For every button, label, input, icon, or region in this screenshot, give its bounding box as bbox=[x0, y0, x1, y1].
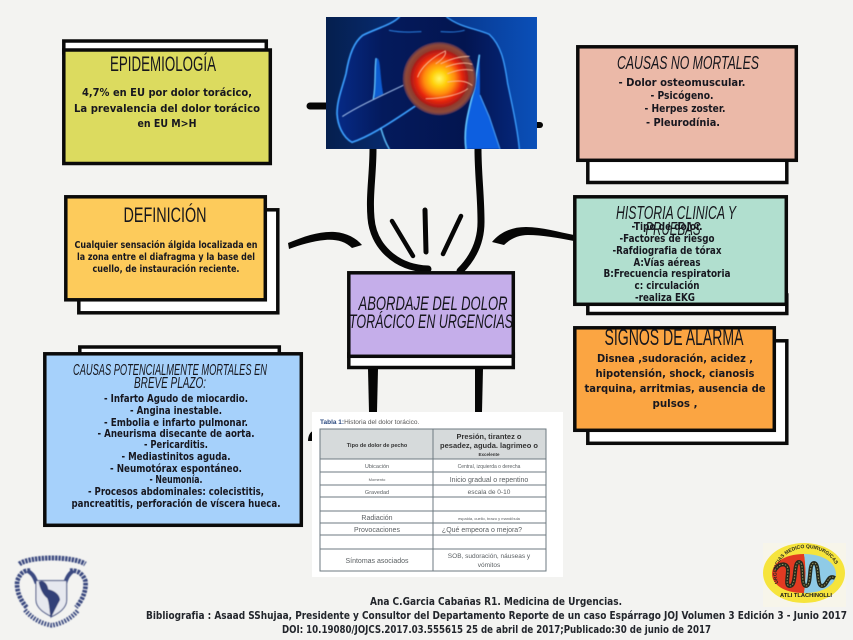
heading: historia clínica y pruebas: PRUEBAS bbox=[646, 219, 700, 239]
table: historia del dolor torácico: Provocaciones bbox=[354, 527, 400, 534]
list: causas no mortales bbox=[618, 77, 746, 129]
torso and arms silhouette bbox=[337, 17, 519, 149]
list: causas potencialmente mortales: - Aneurisma disecante de aorta. bbox=[98, 428, 254, 440]
list: causas potencialmente mortales: - Infarto Agudo de miocardio. bbox=[104, 393, 248, 405]
panel: central title bbox=[349, 273, 513, 368]
footer: credits and bibliography: Ana C.Garcia Cabañas R1. Medicina de Urgencias. bbox=[370, 596, 622, 608]
text: signos de alarma: Disnea ,sudoración, acidez , bbox=[597, 352, 753, 365]
connector lines bbox=[288, 106, 574, 441]
title bbox=[349, 294, 513, 333]
table: historia del dolor torácico bbox=[312, 412, 563, 577]
table: historia del dolor torácico: Presión, tirantez o bbox=[456, 432, 522, 441]
heading: causas potencialmente mortales: CAUSAS POTENCIALMENTE MORTALES EN bbox=[73, 362, 267, 379]
list: historia clínica y pruebas: -Factores de riesgo bbox=[620, 233, 714, 245]
text: signos de alarma: pulsos , bbox=[652, 397, 698, 410]
list: historia clínica y pruebas bbox=[604, 221, 730, 304]
panel: epidemiología bbox=[64, 41, 270, 164]
list: historia clínica y pruebas: -Tipo de dolor. bbox=[632, 221, 702, 233]
list: causas potencialmente mortales: pancreatitis, perforación de víscera hueca. bbox=[72, 498, 280, 510]
footer: credits and bibliography: DOI: 10.19080/JOJCS.2017.03.555615 25 de abril de 2017;Publicado:30 de junio de 2017 bbox=[282, 624, 711, 636]
table: historia del dolor torácico: pesadez, aguda. lagrimeo o bbox=[440, 441, 538, 450]
list: historia clínica y pruebas: -Rafdiografia de tórax bbox=[612, 245, 722, 257]
list: causas potencialmente mortales bbox=[72, 393, 280, 510]
table: historia del dolor torácico: Momento bbox=[369, 477, 386, 482]
text: epidemiología: en EU M>H bbox=[138, 117, 196, 130]
heading: epidemiología: EPIDEMIOLOGÍA bbox=[110, 53, 216, 76]
list: causas no mortales: - Pleurodínia. bbox=[646, 117, 720, 129]
table: historia del dolor torácico: SOB, sudoración, náuseas y bbox=[448, 553, 531, 560]
list: causas no mortales: - Dolor osteomuscular. bbox=[618, 77, 746, 89]
text: epidemiología: La prevalencia del dolor torácico bbox=[74, 102, 260, 115]
table: historia del dolor torácico: Inicio gradual o repentino bbox=[450, 477, 528, 484]
table: historia del dolor torácico: ¿Qué empeora o mejora? bbox=[442, 527, 522, 534]
heading: definición: DEFINICIÓN bbox=[124, 204, 206, 227]
table: historia del dolor torácico: Tabla 1:Historia del dolor torácico. bbox=[320, 419, 419, 426]
list: causas potencialmente mortales: - Pericarditis. bbox=[144, 439, 208, 451]
panel: signos de alarma bbox=[575, 324, 787, 443]
list: causas potencialmente mortales: - Embolia e infarto pulmonar. bbox=[104, 417, 248, 429]
panel: definición bbox=[66, 197, 278, 313]
list: causas potencialmente mortales: - Neumonía. bbox=[150, 474, 202, 486]
table: historia del dolor torácico: Radiación bbox=[361, 515, 393, 522]
text: signos de alarma: hipotensión, shock, cianosis bbox=[596, 367, 755, 380]
table: historia del dolor torácico: Ubicación bbox=[365, 464, 389, 470]
heading: causas potencialmente mortales bbox=[73, 362, 267, 392]
table: historia del dolor torácico: Gravedad bbox=[365, 490, 389, 496]
table: historia del dolor torácico: Central, izquierda o derecha bbox=[458, 464, 521, 470]
footer: credits and bibliography bbox=[146, 596, 847, 636]
heading: historia clínica y pruebas bbox=[616, 203, 737, 239]
logo: UNAM bbox=[17, 558, 86, 625]
table: historia del dolor torácico: Tipo de dolor de pecho bbox=[347, 443, 408, 449]
list: historia clínica y pruebas: -realiza EKG bbox=[635, 292, 695, 304]
list: causas potencialmente mortales: - Mediastinitos aguda. bbox=[122, 451, 230, 463]
logo: urgencias médico quirúrgicas: ATLI TLACHINOLLI bbox=[780, 593, 832, 599]
list: causas potencialmente mortales: - Procesos abdominales: colecistitis, bbox=[88, 486, 264, 498]
table: historia del dolor torácico: Excelente bbox=[478, 452, 500, 457]
list: causas potencialmente mortales: - Neumotórax espontáneo. bbox=[110, 463, 242, 475]
logo: urgencias médico quirúrgicas: URGENCIAS MEDICO QUIRURGICAS bbox=[773, 544, 838, 584]
panel: causas potencialmente mortales bbox=[45, 347, 301, 525]
text: epidemiología bbox=[74, 86, 260, 130]
title: ABORDAJE DEL DOLOR bbox=[358, 294, 508, 315]
text: definición: cuello, de instauración reciente. bbox=[92, 264, 240, 275]
list: historia clínica y pruebas: A:Vías aéreas bbox=[634, 257, 700, 269]
list: causas no mortales: - Psicógeno. bbox=[650, 90, 714, 102]
text: signos de alarma: tarquina, arritmias, ausencia de bbox=[584, 382, 766, 395]
text: signos de alarma bbox=[584, 352, 766, 410]
panel: historia clínica y pruebas bbox=[575, 197, 787, 314]
table: historia del dolor torácico: escala de 0-10 bbox=[468, 489, 511, 496]
text: definición: la zona entre el diafragma y la base del bbox=[77, 252, 255, 263]
text: epidemiología: 4,7% en EU por dolor torácico, bbox=[82, 86, 252, 99]
table: historia del dolor torácico: espalda, cuello, brazo y mandíbula bbox=[458, 516, 521, 521]
list: causas no mortales: - Herpes zoster. bbox=[644, 103, 726, 115]
table: historia del dolor torácico: vómitos bbox=[478, 562, 501, 569]
text: definición: Cualquier sensación álgida localizada en bbox=[74, 240, 258, 251]
list: causas potencialmente mortales: - Angina inestable. bbox=[130, 405, 222, 417]
heading: causas potencialmente mortales: BREVE PLAZO: bbox=[134, 375, 206, 392]
list: historia clínica y pruebas: B:Frecuencia respiratoria bbox=[604, 268, 730, 280]
logo: urgencias médico quirúrgicas bbox=[763, 543, 845, 603]
list: historia clínica y pruebas: c: circulación bbox=[634, 280, 700, 292]
text: definición bbox=[74, 240, 258, 275]
heading: signos de alarma: SIGNOS DE ALARMA bbox=[604, 324, 744, 350]
image: chest pain illustration bbox=[326, 17, 537, 149]
heading: historia clínica y pruebas: HISTORIA CLINICA Y bbox=[616, 203, 737, 223]
table: historia del dolor torácico: Síntomas asociados bbox=[345, 558, 409, 565]
heading: causas no mortales: CAUSAS NO MORTALES bbox=[617, 53, 759, 73]
panel: causas no mortales bbox=[578, 47, 796, 182]
title: TORÁCICO EN URGENCIAS bbox=[349, 312, 513, 333]
